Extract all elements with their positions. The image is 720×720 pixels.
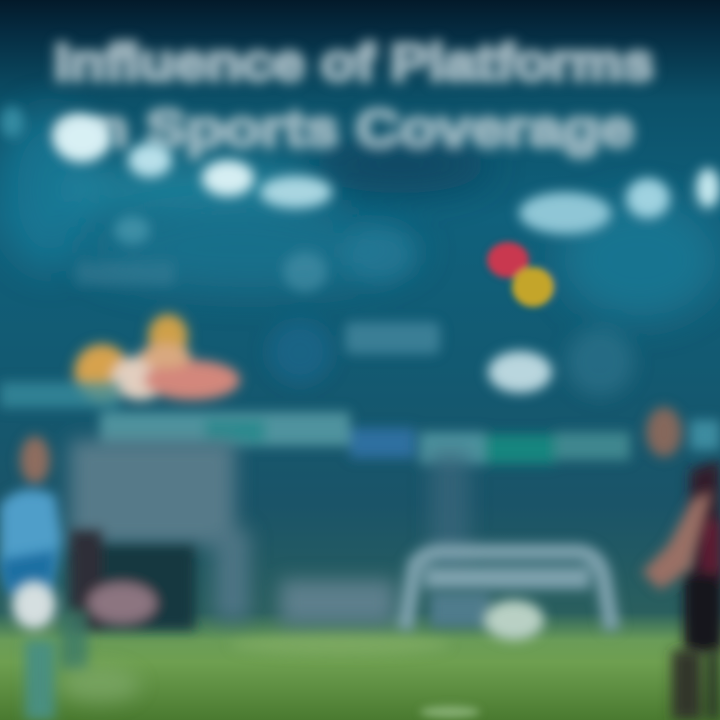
player right (642, 407, 720, 720)
tunnel with figures (70, 530, 195, 630)
stadium lights (0, 106, 720, 244)
background glows (0, 110, 720, 320)
player left (0, 436, 140, 720)
faint chart labels (75, 227, 634, 396)
football (484, 600, 544, 640)
title: Influence of Platforms (54, 34, 654, 92)
title: on Sports Coverage (54, 100, 634, 158)
white label block (488, 351, 552, 393)
goal (405, 552, 612, 640)
stadium band (0, 382, 720, 464)
stands building (70, 440, 470, 625)
orange and red shape (74, 314, 240, 400)
title (54, 34, 654, 158)
pitch highlights (230, 635, 480, 718)
icon: red and yellow circles (487, 242, 554, 307)
